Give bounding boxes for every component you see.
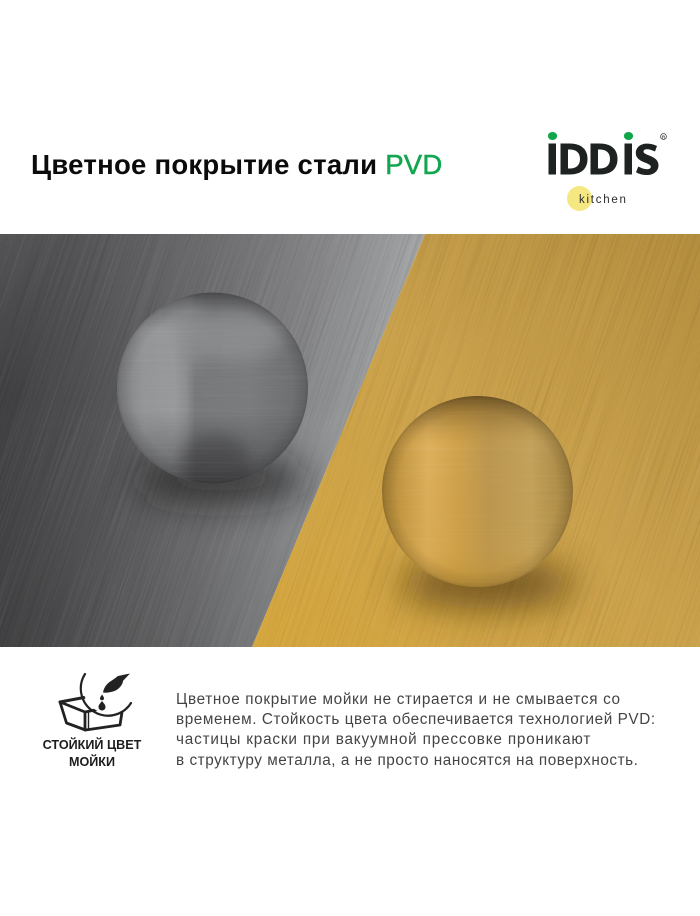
white disc over box <box>83 660 137 714</box>
icon: box with paint brush <box>58 672 132 732</box>
logo: IDDIS kitchen: R <box>662 134 666 139</box>
gold background <box>252 234 700 647</box>
icon caption: МОЙКИ <box>69 754 115 768</box>
logo: IDDIS kitchen <box>548 132 667 211</box>
description paragraph: Цветное покрытие мойки не стирается и не смывается со <box>176 691 621 708</box>
gold sphere <box>382 395 574 588</box>
photo panel: brushed steel and gold spheres <box>0 234 700 647</box>
title: Цветное покрытие стали PVD <box>31 149 443 180</box>
description paragraph <box>176 691 656 769</box>
steel sphere <box>117 292 309 495</box>
logo: IDDIS kitchen: kitchen <box>579 194 628 206</box>
icon caption: СТОЙКИЙ ЦВЕТ <box>43 738 141 752</box>
steel background <box>0 234 425 647</box>
description paragraph: в структуру металла, а не просто наносятся на поверхность. <box>176 752 638 769</box>
icon caption <box>43 737 142 768</box>
description paragraph: частицы краски при вакуумной прессовке проникают <box>176 731 591 748</box>
description paragraph: временем. Стойкость цвета обеспечивается технологией PVD: <box>176 711 656 728</box>
